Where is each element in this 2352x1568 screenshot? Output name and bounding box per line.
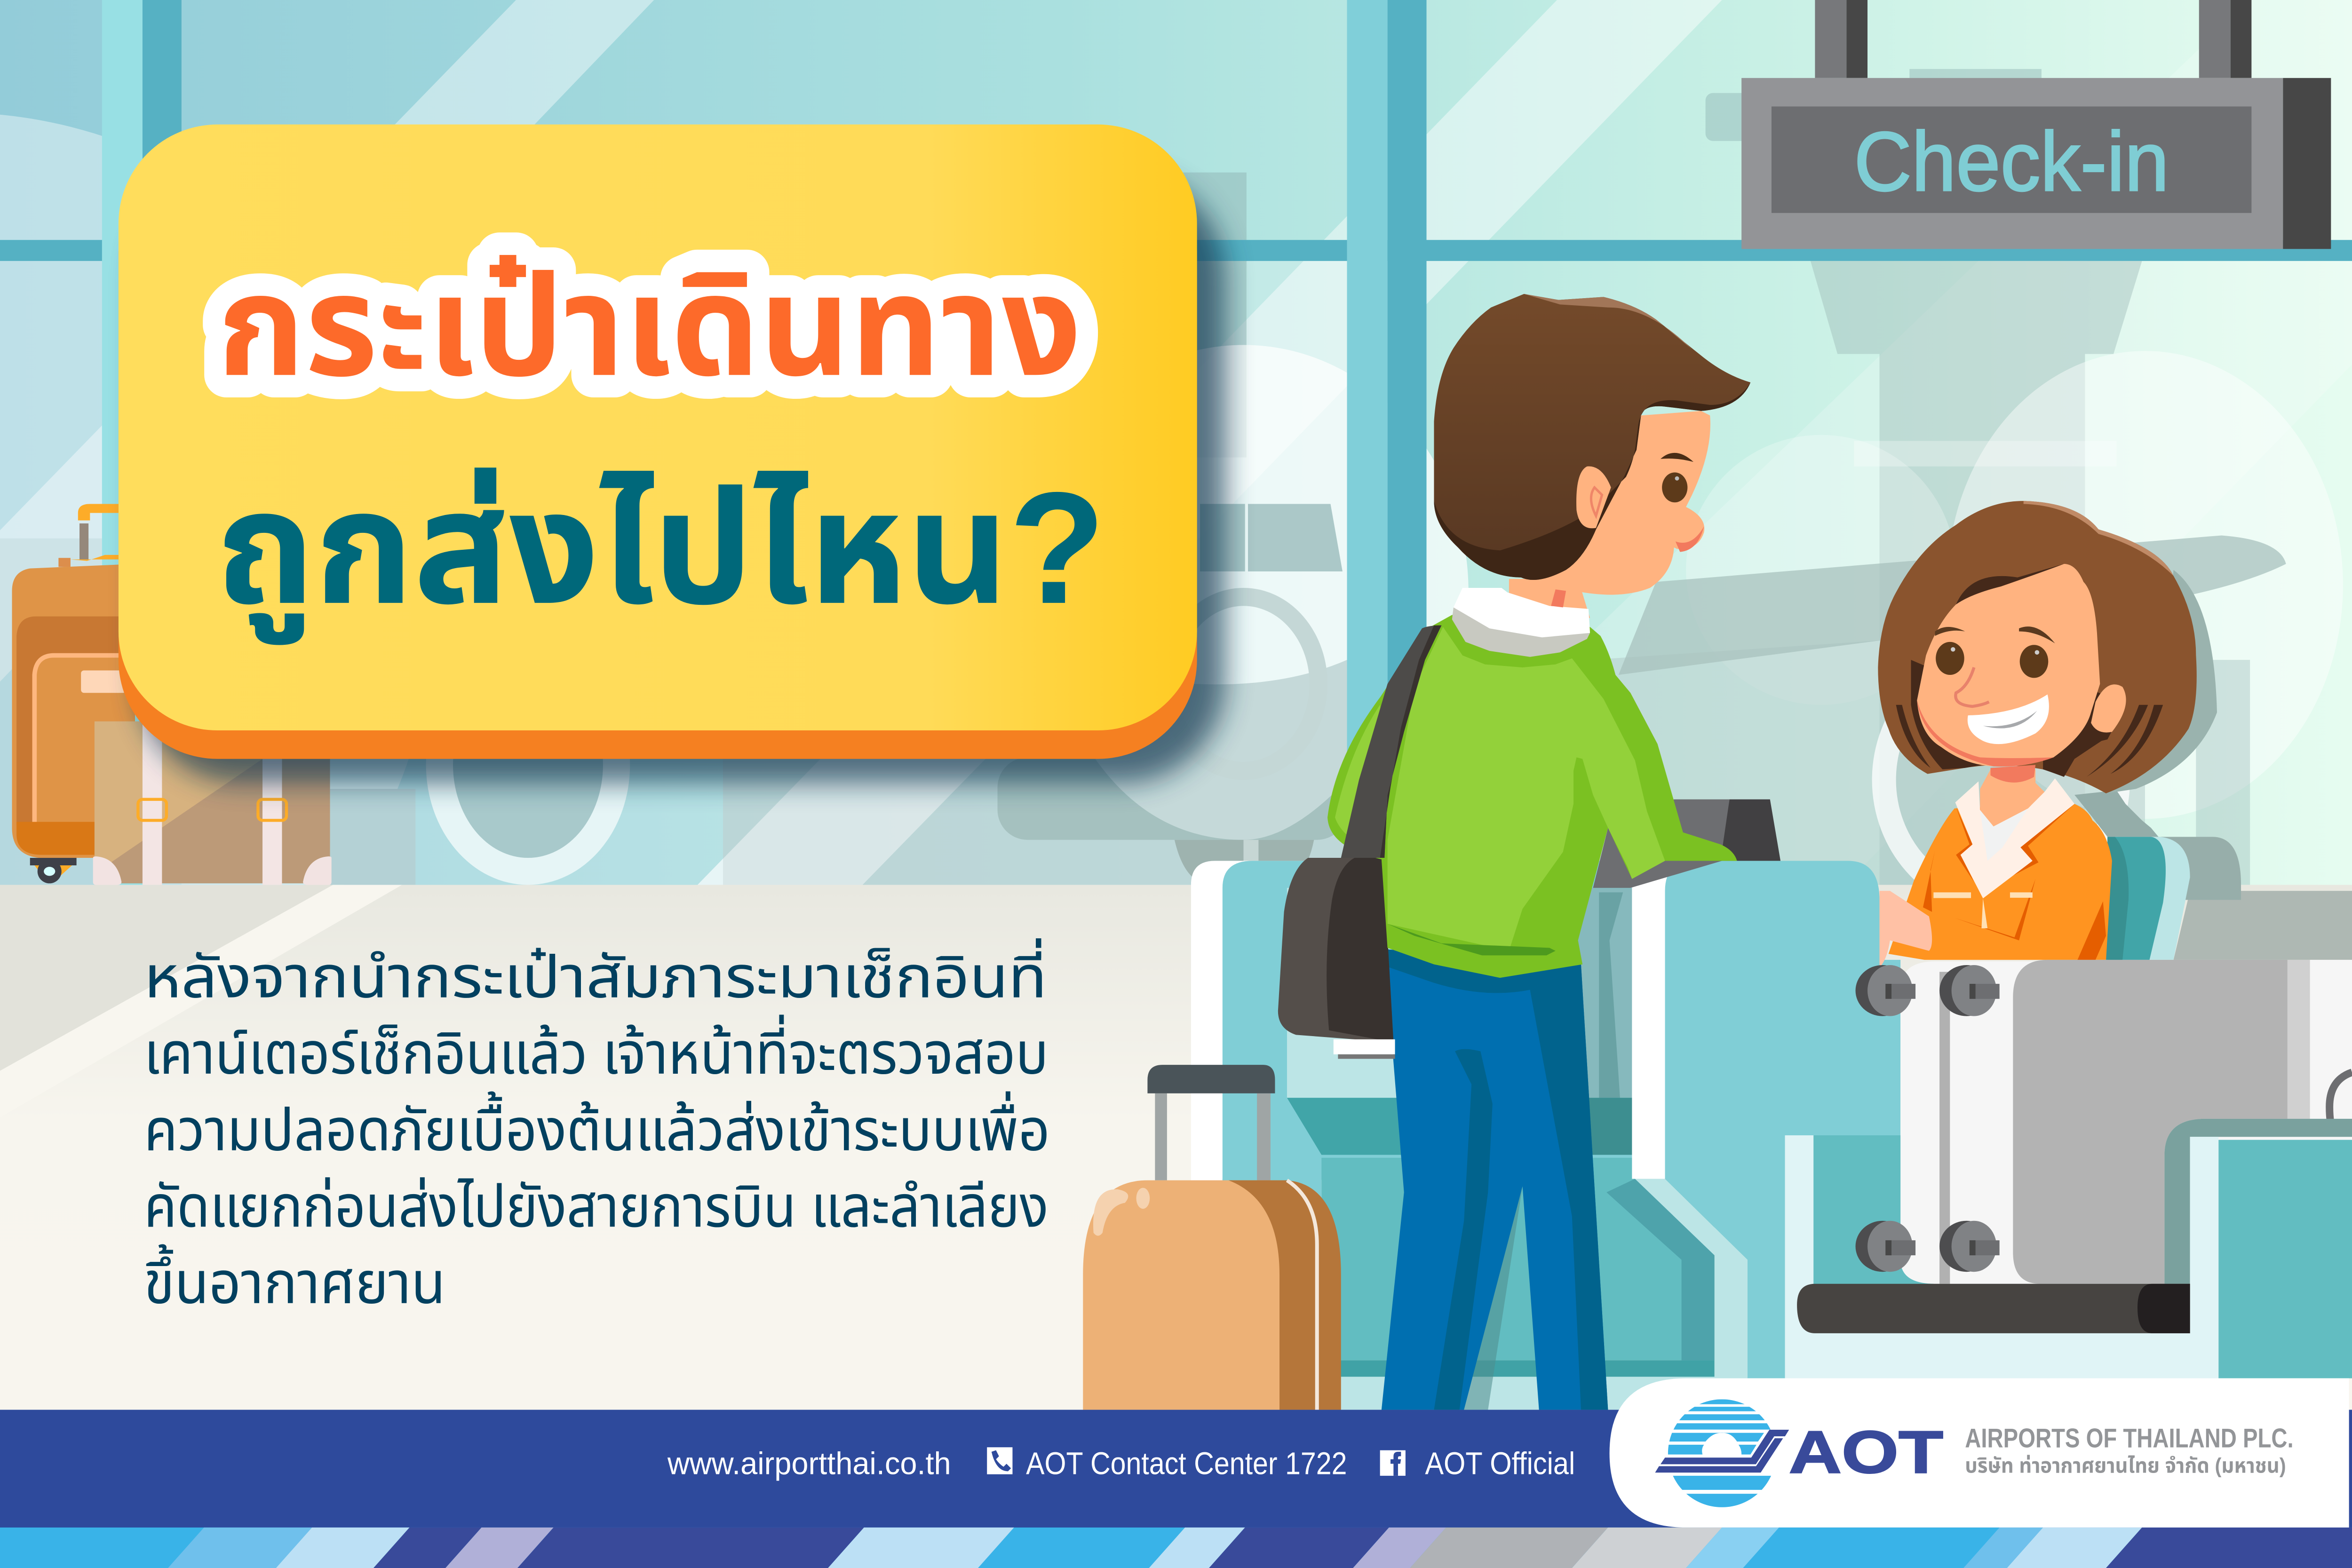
dark hair shading [1896,660,2163,777]
company name English: AIRPORTS OF THAILAND PLC. [1965,1423,2294,1453]
body text: คัดแยกก่อนส่งไปยังสายการบิน และลำเลียง [144,1174,1049,1240]
jacket [1889,778,2112,960]
check-in sign [1741,0,2331,249]
website text: www.airportthai.co.th [667,1446,951,1481]
body text: หลังจากนำกระเป๋าสัมภาระมาเช็กอินที่ [144,938,1047,1010]
woman's hand [1880,891,1932,967]
logo panel [1610,1378,2349,1528]
AOT globe logo [1655,1399,1789,1507]
chair and back wall [2074,791,2352,960]
bolts [1856,965,2000,1272]
body text: ความปลอดภัยเบื้องต้นแล้วส่งเข้าระบบเพื่อ [144,1091,1050,1163]
woman's face [1917,564,2100,767]
nose shading [1676,526,1704,552]
footer bar [0,1410,2352,1528]
title line 1: กระเป๋าเดินทาง [217,247,1081,405]
floor [0,885,2352,1410]
woman's eyes and eyebrows [1935,626,2055,678]
contact text: AOT Contact Center 1722 [1026,1446,1347,1481]
body text: ขึ้นอากาศยาน [144,1244,445,1316]
AOT wordmark: AOT [1789,1419,1943,1486]
eye and eyebrow [1661,453,1693,502]
background: airport window [0,0,2352,1087]
phone icon [987,1447,1012,1474]
window frame [0,0,2352,885]
woman's hair shadow [2106,570,2217,793]
title line 2: ถูกส่งไปไหน? [216,459,1105,645]
computer monitor [1593,800,1780,888]
woman's neck [1980,769,2044,826]
trousers [1382,950,1608,1410]
baggage conveyor machine [1785,960,2352,1378]
sweater [1327,615,1737,978]
shoulder bag [1278,858,1395,1059]
smile [1968,694,2049,744]
bag strap [1341,626,1441,858]
passenger [1278,294,1780,1410]
facebook icon [1380,1450,1406,1476]
body text: เคาน์เตอร์เช็กอินแล้ว เจ้าหน้าที่จะตรวจสอบ [144,1014,1049,1086]
facebook text: AOT Official [1425,1446,1575,1481]
face [1509,411,1710,595]
title card [119,125,1225,783]
neck [1509,579,1590,618]
check-in counters [1191,861,1900,1410]
check-in sign: Check-in [1854,114,2169,208]
woman's ear [2091,684,2126,732]
body text [144,938,1050,1316]
woman's nose [1955,667,1989,706]
hair back [1878,501,2197,793]
woman's hair fringe [1956,564,2064,604]
background: airplane and control tower silhouettes [330,69,2343,903]
company name Thai: บริษัท ท่าอากาศยานไทย จำกัด (มหาชน) [1965,1455,2286,1478]
ear [1576,467,1611,528]
background suitcase stack [12,504,332,885]
sweater collar [1452,588,1590,657]
hair [1434,294,1750,580]
foreground suitcase [1083,1065,1341,1410]
bottom stripes [0,1528,2352,1568]
check-in agent [1878,501,2352,967]
